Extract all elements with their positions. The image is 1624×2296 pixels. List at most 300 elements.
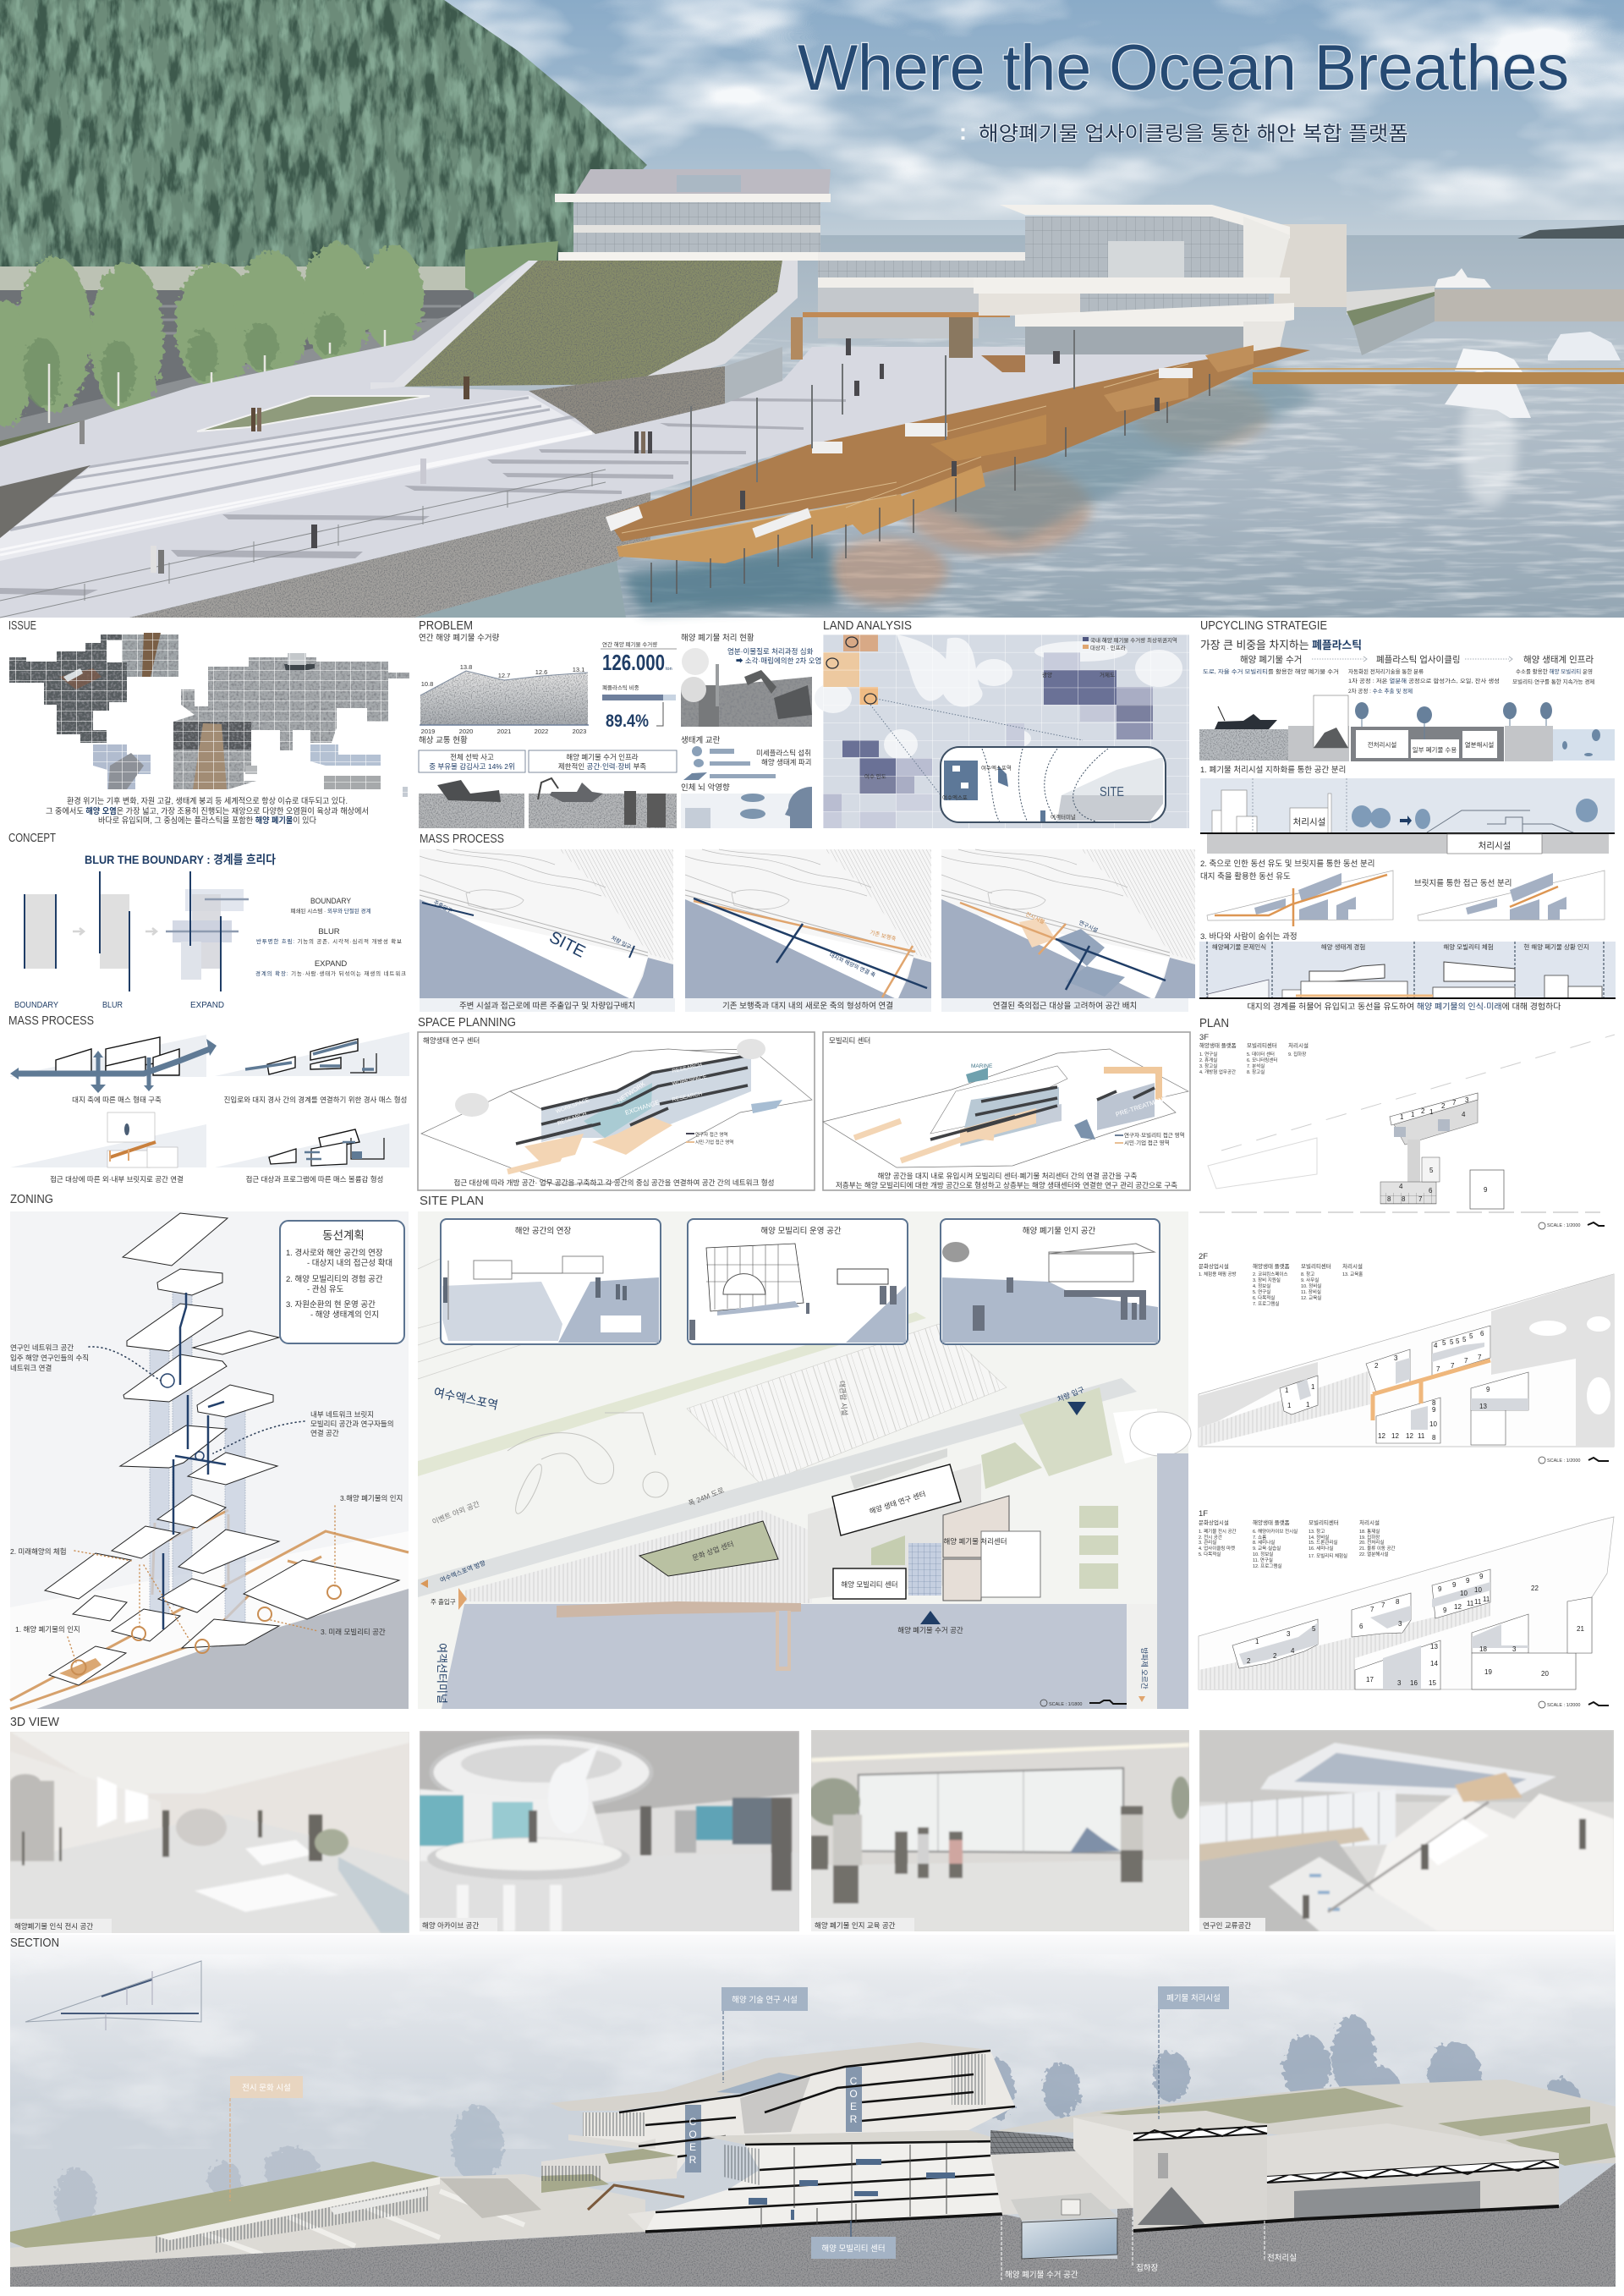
- floor plan 1F: 5: [1312, 1625, 1316, 1633]
- floor plan 1F: 2: [1273, 1652, 1277, 1660]
- scale bar 2F: SCALE : 1/2000: [1547, 1458, 1580, 1464]
- floor plan 1F: 14: [1430, 1660, 1438, 1667]
- label: waste treatment: [1158, 1986, 1229, 2121]
- heading: land analysis: LAND ANALYSIS: [823, 618, 912, 633]
- human brain impact illustration: [681, 783, 812, 828]
- ecosystem bars: 미세플라스틱 섭취: [756, 749, 811, 757]
- zoning annotations: 모빌리티 공간과 연구자들의: [310, 1420, 394, 1428]
- floor plan 2F: 문화상업시설: [1199, 1262, 1229, 1270]
- floor plan 1F: 15: [1429, 1679, 1436, 1687]
- step descriptions: 수소를 활용한 해양 모빌리티 운영: [1516, 667, 1593, 675]
- floor plan 1F: 17. 모빌리티 체험실: [1309, 1552, 1347, 1559]
- issue text: 그 중에서도 해양 오염은 가장 넓고, 가장 조용히 진행되는 재앙으로 다양한 오염원이 육상과 해상에서: [46, 806, 369, 816]
- floor plan 3F: 4: [1462, 1111, 1466, 1118]
- floor plan 1F: 9: [1466, 1577, 1470, 1585]
- floor plan 1F: 3: [1287, 1630, 1291, 1638]
- floor plan 1F: 3: [1512, 1645, 1517, 1653]
- concept title: BLUR THE BOUNDARY : 경계를 흐리다: [85, 853, 276, 866]
- zoning annotations: 연구인 네트워크 공간: [10, 1343, 74, 1352]
- floor plan 3F: 1: [1429, 1108, 1434, 1116]
- floor plan 3F: 2: [1421, 1107, 1425, 1115]
- research centre axonometric panel: 해양생태 연구 센터: [423, 1036, 480, 1045]
- scale bar 3F: SCALE : 1/2000: [1547, 1223, 1580, 1228]
- render: waste education space: [806, 1730, 1190, 1931]
- heading: 3d view: 3D VIEW: [10, 1715, 60, 1729]
- step 3 diagram: 현 해양 폐기물 상황 인지: [1523, 942, 1589, 951]
- grass verge: [0, 341, 431, 448]
- research building: [550, 2042, 1015, 2172]
- area chart: annual marine waste: 13.8: [460, 663, 472, 671]
- area chart: annual marine waste: 2020: [459, 728, 473, 735]
- maritime traffic boxes: 전체 선박 사고: [450, 753, 494, 761]
- render: awareness exhibition space: 해양폐기물 인식 전시 공간: [14, 1922, 93, 1931]
- wedge 1: [10, 1035, 217, 1093]
- floor plan 3F: 7: [1452, 1099, 1457, 1107]
- maritime photos: [419, 778, 677, 828]
- floor plan 3F: 7. 분석실: [1247, 1063, 1265, 1069]
- floor plan 1F: [1199, 1509, 1614, 1689]
- floor plan 3F: 7: [1418, 1195, 1423, 1203]
- floor plan 2F: 7. 프로그램실: [1253, 1300, 1279, 1307]
- floor plan 1F: 9: [1443, 1607, 1447, 1614]
- floor plan 1F: 8. 세미나실: [1253, 1539, 1275, 1546]
- bridge and core: [791, 224, 1347, 360]
- step 3 heading: 3. 바다와 사람이 숨쉬는 과정: [1200, 931, 1298, 942]
- research building: R: [689, 2154, 697, 2166]
- research centre axonometric panel: 시민·기업 접근 영역: [695, 1139, 733, 1145]
- step 3 diagram: 해양 모빌리티 체험: [1443, 942, 1494, 951]
- recycling section diagram: 일부 폐기물 수용: [1413, 745, 1457, 754]
- zoning annotations: 네트워크 연결: [10, 1364, 52, 1372]
- floor plan 2F: 2: [1374, 1362, 1379, 1370]
- floor plan 3F: 8: [1402, 1195, 1406, 1203]
- site plan map: [418, 1211, 1191, 1709]
- floor plan 2F: 4. 정보실: [1253, 1283, 1270, 1289]
- floor plan 1F: 10: [1474, 1586, 1482, 1594]
- floor plan 1F: 10: [1460, 1590, 1468, 1597]
- floor plan 2F: 1: [1311, 1383, 1315, 1391]
- world map photo mosaic: [8, 633, 411, 797]
- floor plan 1F: 1. 폐기물 전시 공간: [1199, 1528, 1237, 1535]
- floor plan 2F: 13. 교육홀: [1342, 1271, 1363, 1277]
- floor plan 3F: 4: [1399, 1183, 1403, 1190]
- research building: R: [850, 2113, 858, 2125]
- map 2: axes: 기존 보행축과 대지 내의 새로운 축의 형성하여 연결: [722, 1001, 893, 1011]
- floor plan 3F: 1: [1400, 1113, 1404, 1121]
- heading: mass process left: MASS PROCESS: [8, 1013, 94, 1028]
- zoning annotations: 3.해양 폐기물의 인지: [340, 1494, 403, 1502]
- site plan labels: 폭 24M 도로: [687, 1486, 726, 1508]
- panel: mass process wedges: [8, 1013, 409, 1184]
- label: marine technology research: [721, 1987, 808, 2083]
- map 1: entrances: 주출입구: [432, 898, 453, 915]
- step 2 heading: 2. 축으로 인한 동선 유도 및 브릿지를 통한 동선 분리: [1200, 859, 1374, 869]
- three-step headings: [1240, 654, 1594, 665]
- inset view: coastal extension: 해안 공간의 연장: [515, 1226, 571, 1236]
- floor plan 2F: 6: [1480, 1330, 1484, 1338]
- floor plan 1F: 8: [1396, 1598, 1400, 1606]
- site plan labels: 이벤트 야외 공간: [431, 1499, 480, 1526]
- scale bar 1F: [1539, 1701, 1609, 1708]
- floor plan 1F: 6: [1359, 1623, 1363, 1630]
- maritime traffic boxes: 중 부유물 감김사고 14% 2위: [429, 762, 515, 771]
- research centre axonometric panel: RESEARCH: [557, 1111, 588, 1127]
- background trees: [56, 2015, 1581, 2232]
- heading: section: SECTION: [10, 1936, 59, 1950]
- callout: circulation plan: - 관심 유도: [307, 1285, 344, 1294]
- floor plan 3F: 8: [1387, 1195, 1391, 1203]
- concept definitions: BOUNDARY: [310, 897, 352, 906]
- human brain impact illustration: 인체 뇌 악영향: [681, 783, 730, 793]
- floor plan 1F: 21: [1577, 1625, 1584, 1633]
- heading: space planning: SPACE PLANNING: [418, 1015, 516, 1030]
- map 3: program placement: 전시시설: [1024, 910, 1046, 926]
- floor plan 2F: 2. 코워킹스페이스: [1253, 1271, 1288, 1277]
- site plan labels: 해양 생태 연구 센터: [868, 1490, 927, 1516]
- waste plant block: [990, 2111, 1559, 2231]
- section perspective: [10, 1935, 1616, 2287]
- left building and green roof: [370, 169, 834, 434]
- render: marine archive space: 해양 아카이브 공간: [422, 1921, 479, 1930]
- zoning annotations: 연결 공간: [310, 1429, 339, 1437]
- inset view: mobility operation: 해양 모빌리티 운영 공간: [760, 1226, 842, 1236]
- floor plan 2F: 7: [1451, 1362, 1455, 1370]
- floor plan 2F: 5: [1456, 1338, 1460, 1345]
- waste treatment status with photo: [681, 633, 821, 727]
- wedge 4: [215, 1123, 409, 1167]
- floor plan 1F: 14. 정비실: [1309, 1534, 1329, 1541]
- site inset map: [941, 747, 1166, 822]
- floor plan 1F: 11: [1467, 1600, 1474, 1607]
- subtitle: 해양폐기물 업사이클링을 통한 해안 복합 플랫폼: [979, 123, 1408, 146]
- research building: O: [849, 2088, 858, 2100]
- label: marine mobility centre: [811, 2221, 896, 2259]
- diagram labels: BLUR: [102, 1000, 123, 1010]
- zoning annotations: 3. 미래 모빌리티 공간: [321, 1628, 386, 1636]
- floor plan 2F: 1. 체험용 매핑 공방: [1199, 1271, 1237, 1277]
- concept definitions: [255, 897, 406, 977]
- callout: circulation plan: 2. 해양 모빌리티의 경험 공간: [286, 1274, 383, 1284]
- floor plan 1F: 2. 전시 공간: [1199, 1534, 1222, 1541]
- floor plan 1F: 19. 집하장: [1359, 1534, 1380, 1541]
- heading: plan: PLAN: [1199, 1016, 1229, 1030]
- research centre axonometric panel: 연구자 접근 영역: [695, 1131, 727, 1138]
- land behind buildings: [990, 2079, 1616, 2164]
- diagram labels: BOUNDARY: [14, 1000, 58, 1010]
- stat: 126,000 ton: ton: [666, 667, 672, 672]
- step 2 diagram left: 대지 축을 활용한 동선 유도: [1200, 871, 1291, 882]
- floor plan 1F: 9: [1479, 1573, 1484, 1580]
- upcycling title: 가장 큰 비중을 차지하는 폐플라스틱: [1200, 639, 1362, 651]
- zoning annotations: 2. 미래해양의 체험: [10, 1547, 67, 1556]
- site inset map: 여객터미널: [1051, 813, 1076, 821]
- floor plan 2F: 13: [1479, 1403, 1487, 1410]
- step 2 diagram left: [1200, 871, 1393, 926]
- floor plan 3F: 6. 모니터링센터: [1247, 1057, 1277, 1063]
- people and lamps: [80, 330, 1160, 574]
- recycling section diagram: 열분해시설: [1465, 740, 1494, 749]
- floor plan 1F: 처리시설: [1359, 1519, 1380, 1526]
- labels: underground spaces: 전처리실: [1267, 2253, 1297, 2263]
- research building: E: [689, 2141, 696, 2153]
- step descriptions: 2차 공정 : 수소 추출 및 정제: [1348, 687, 1413, 695]
- recycling section diagram: [1199, 695, 1615, 761]
- floor plan 2F: 10: [1429, 1420, 1437, 1428]
- research centre axonometric panel: WORKSPACE: [672, 1074, 708, 1087]
- research centre axonometric panel: WORKSPACE: [555, 1097, 591, 1115]
- floor plan 1F: 9. 교육·실습실: [1253, 1545, 1281, 1552]
- floor plan 2F: 해양생태 플랫폼: [1253, 1262, 1290, 1270]
- floor plan 3F: 6: [1429, 1187, 1433, 1195]
- terraces and timber stair: [541, 2149, 744, 2232]
- callout: circulation plan: - 대상지 내의 접근성 확대: [307, 1258, 392, 1268]
- floor plan 1F: 6. 해양아카이브 전시실: [1253, 1528, 1298, 1535]
- stat: 89.4% plastic share: 89.4%: [606, 711, 649, 731]
- research building: C: [689, 2116, 697, 2128]
- floor plan 3F: 1. 연구실: [1199, 1051, 1217, 1057]
- maritime traffic boxes: 해양 폐기물 수거 인프라: [566, 753, 639, 761]
- floor plan 2F: 3. 장비 지원실: [1253, 1277, 1281, 1283]
- floor plan 2F: 6. 다목적실: [1253, 1294, 1275, 1301]
- step 2 diagram right: [1414, 871, 1605, 920]
- panel: plan: [1199, 1016, 1615, 1708]
- floor plan 1F: 9: [1452, 1581, 1457, 1589]
- breakwater and boats: [1253, 225, 1624, 418]
- title: Where the Ocean Breathes: [798, 32, 1569, 104]
- label: marine technology research: 해양 기술 연구 시설: [732, 1995, 798, 2005]
- labels: underground spaces: [1001, 2216, 1297, 2280]
- research centre axonometric panel: RESEARCH: [672, 1063, 703, 1074]
- site inset map: SITE: [1100, 785, 1124, 799]
- step descriptions: [1203, 667, 1594, 695]
- concept definitions: 반투명한 흐림: 기능의 공존, 시각적·심리적 개방성 확보: [256, 937, 402, 945]
- heading: issue: ISSUE: [8, 618, 36, 633]
- floor plan 1F: 3: [1398, 1620, 1402, 1628]
- area chart: annual marine waste: 13.1: [573, 666, 584, 673]
- ecosystem bars: 생태계 교란: [681, 735, 721, 745]
- floor plan 2F: 9: [1486, 1386, 1490, 1393]
- area chart: annual marine waste: 연간 해양 폐기물 수거량: [419, 633, 500, 643]
- floor plan 3F: 2. 휴게실: [1199, 1057, 1217, 1063]
- label: marine mobility centre: 해양 모빌리티 센터: [821, 2244, 886, 2254]
- site plan labels: 처량 입구: [1056, 1385, 1086, 1403]
- scale bar 3F: [1539, 1222, 1605, 1229]
- panel: land analysis: [815, 618, 1189, 828]
- expand diagram: [166, 871, 249, 991]
- floor plan 3F: 4. 개방형 업무공간: [1199, 1068, 1236, 1075]
- callout: circulation plan: [280, 1221, 404, 1343]
- floor plan 1F: 4: [1291, 1647, 1295, 1655]
- maritime traffic boxes: [419, 735, 677, 772]
- floor plan 1F: 12: [1454, 1603, 1462, 1611]
- legend: 대상지 · 인프라: [1090, 644, 1126, 651]
- floor plan 1F: 11: [1483, 1596, 1490, 1603]
- issue text: [46, 796, 369, 826]
- floor plan 1F: 22. 열분해시설: [1359, 1551, 1388, 1557]
- panel: site plan: [418, 1194, 1191, 1709]
- floor plan 1F: 22: [1531, 1585, 1539, 1592]
- floor plan 3F: 1: [1411, 1111, 1415, 1118]
- floor plan 2F: 12: [1391, 1432, 1399, 1440]
- panel: mass process maps: [420, 832, 1195, 1012]
- zoning annotations: [10, 1343, 403, 1636]
- site plan labels: 방파제 오르간: [1140, 1647, 1149, 1689]
- floor plan 1F: 9: [1438, 1585, 1442, 1593]
- floor plan 1F: 11. 연구실: [1253, 1557, 1273, 1563]
- maritime traffic boxes: 해상 교통 현황: [419, 735, 468, 745]
- maritime traffic boxes: 제한적인 공간·인력·장비 부족: [558, 762, 646, 771]
- site plan labels: 여객선터미널: [436, 1643, 448, 1704]
- floor plan 2F: 1: [1306, 1401, 1310, 1409]
- floor plan 1F: 해양생태 플랫폼: [1253, 1519, 1290, 1526]
- floor plan 3F: [1199, 1033, 1615, 1212]
- stat: 126,000 ton: 연간 해양 폐기물 수거량: [602, 640, 657, 648]
- scale bar 1F: SCALE : 1/2000: [1547, 1703, 1580, 1708]
- step 3 diagram: 해양폐기물 문제인식: [1212, 942, 1266, 951]
- mobility centre axonometric panel: [823, 1032, 1190, 1190]
- zoning annotations: 입주 해양 연구인들의 수직: [10, 1354, 89, 1362]
- right building: [974, 205, 1294, 372]
- map 1: entrances: 주변 시설과 접근로에 따른 주출입구 및 차량입구배치: [459, 1001, 635, 1011]
- floor plan 2F: 1: [1285, 1387, 1289, 1394]
- step 3 diagram: [1199, 942, 1616, 998]
- inset view: waste awareness: 해양 폐기물 인지 공간: [1023, 1226, 1096, 1236]
- floor plan 3F: 9: [1484, 1186, 1488, 1194]
- label: exhibition and culture: 전시 문화 시설: [242, 2084, 291, 2093]
- floor plan 3F: 모빌리티센터: [1247, 1041, 1277, 1049]
- floor plan 2F: 12: [1378, 1432, 1385, 1440]
- map 1: entrances: [420, 849, 675, 1012]
- recycling section diagram: 전처리시설: [1368, 740, 1396, 749]
- panel: issue: [8, 618, 411, 826]
- site plan labels: 해양 폐기물 처리센터: [943, 1537, 1007, 1546]
- floor plan 2F: 7: [1478, 1354, 1482, 1361]
- area chart: annual marine waste: 2019: [421, 728, 435, 735]
- floor plan 1F: 7: [1370, 1606, 1374, 1613]
- floor plan 2F: 1: [1287, 1402, 1292, 1409]
- floor plan 1F: 7: [1381, 1601, 1385, 1609]
- floor plan 2F: 5: [1442, 1339, 1446, 1347]
- floor plan 2F: 11. 장비실: [1301, 1288, 1321, 1295]
- blur diagram: [100, 871, 156, 991]
- wedge 2 caption: 진입로와 대지 경사 간의 경계를 연결하기 위한 경사 매스 형성: [224, 1096, 407, 1104]
- heading: site plan: SITE PLAN: [420, 1194, 484, 1208]
- wedge 3 caption: 접근 대상에 따른 외·내부 브릿지로 공간 연결: [50, 1175, 184, 1184]
- concept definitions: BLUR: [318, 927, 340, 937]
- site plan labels: 해양 폐기물 수거 공간: [897, 1626, 963, 1634]
- regional grid map: 거제도: [1100, 671, 1115, 678]
- area chart: annual marine waste: [419, 633, 589, 735]
- area chart: annual marine waste: 2022: [535, 728, 548, 735]
- heading: concept: CONCEPT: [8, 831, 56, 845]
- map 2: axes: [685, 849, 941, 1012]
- step 3 diagram: 해양 생태계 경험: [1321, 942, 1365, 951]
- step descriptions: 1차 공정 : 저온 열분해 공정으로 합성가스, 오일, 잔사 생성: [1348, 677, 1500, 684]
- map 2: axes: 대지와 해양의 연결 축: [828, 951, 877, 979]
- area chart: annual marine waste: 2021: [497, 728, 511, 735]
- floor plan 2F: [1199, 1252, 1614, 1447]
- stat: 89.4% plastic share: 폐플라스틱 비중: [602, 684, 639, 691]
- stat: 126,000 ton: 126.000: [602, 650, 665, 675]
- site plan labels: 여수엑스포역 방향: [438, 1558, 486, 1585]
- waste treatment status with photo: 해양 폐기물 처리 현황: [681, 633, 754, 643]
- floor plan 3F: 5: [1429, 1167, 1434, 1174]
- floor plan 2F: 9: [1432, 1406, 1436, 1414]
- floor plan 2F: 5: [1469, 1332, 1473, 1340]
- step 3 caption: 대지의 경계를 허물어 유입되고 동선을 유도하여 해양 폐기물의 인식·미래 에 대해 경험하다: [1247, 1002, 1561, 1012]
- step 1 diagram: [1200, 778, 1615, 854]
- floor plan 2F: 3: [1394, 1354, 1398, 1362]
- heading: upcycling strategie: UPCYCLING STRATEGIE: [1200, 618, 1327, 633]
- map 3: program placement: 연결된 축의접근 대상을 고려하여 공간 배치: [993, 1001, 1137, 1011]
- area chart: annual marine waste: 12.6: [535, 668, 547, 676]
- floor plan 2F: 모빌리티센터: [1301, 1262, 1331, 1270]
- area chart: annual marine waste: 2023: [573, 728, 586, 735]
- ecosystem bars: 해양 생태계 파괴: [761, 758, 811, 766]
- waste treatment status with photo: 염분·이물질로 처리과정 심화: [727, 647, 814, 656]
- floor plan 2F: 4: [1434, 1342, 1438, 1349]
- floor plan 3F: 9. 집하장: [1288, 1051, 1306, 1057]
- ecosystem bars: [681, 735, 811, 780]
- green-roof exhibition wedge: [10, 2161, 440, 2253]
- waste treatment status with photo: ➡ 소각·매립에의한 2차 오염: [736, 656, 821, 665]
- heading: mass process: MASS PROCESS: [420, 832, 504, 846]
- floor plan 1F: 문화상업시설: [1199, 1519, 1229, 1526]
- callout: circulation plan: 동선계획: [322, 1229, 365, 1242]
- floor plan 1F: 모빌리티센터: [1309, 1519, 1339, 1526]
- concept definitions: 경계의 확장: 기능·사람·생태가 뒤섞이는 재생의 네트워크: [255, 969, 406, 977]
- mountain forest: [0, 0, 647, 355]
- site inset map: 여수엑스포역: [981, 764, 1012, 772]
- boundary diagram: [25, 894, 84, 969]
- floor plan 2F: 12: [1406, 1432, 1413, 1440]
- floor plan 1F: 1: [1255, 1638, 1259, 1645]
- floor plan 2F: 7: [1436, 1365, 1440, 1373]
- regional grid map: 여수 인도: [864, 772, 886, 780]
- panel: upcycling strategy: [1199, 618, 1616, 1012]
- floor plan 1F: 12. 프로그램실: [1253, 1563, 1281, 1569]
- mobility centre axonometric panel: PRE-TREATMENT: [1115, 1095, 1168, 1118]
- render: marine archive space: [420, 1731, 799, 1931]
- floor plan 3F: 5. 데이터 센터: [1247, 1051, 1275, 1057]
- panel: section: [10, 1935, 1616, 2287]
- floor plan 2F: 8: [1432, 1434, 1436, 1442]
- row of birch trees: [0, 242, 424, 427]
- map 1: entrances: 처량 입구: [610, 934, 633, 951]
- floor plan 1F: 3. 관리실: [1199, 1539, 1216, 1546]
- site plan labels: SCALE : 1/1800: [1049, 1702, 1082, 1707]
- step descriptions: 모빌리티·연구를 통한 지속가능 경제: [1512, 678, 1594, 685]
- floor plan 1F: 5. 다목적실: [1199, 1551, 1221, 1557]
- site plan labels: 문화 상업 센터: [691, 1540, 735, 1563]
- three-step headings: 해양 생태계 인프라: [1523, 654, 1594, 665]
- floor plan 2F: 11: [1418, 1432, 1425, 1440]
- panel: concept: [8, 831, 406, 1010]
- key plan: [25, 1961, 201, 2030]
- zoning annotations: 내부 네트워크 브릿지: [310, 1410, 374, 1419]
- legend: 국내 해양 폐기물 수거량 최상위권지역: [1090, 636, 1177, 644]
- research centre axonometric panel: EXCHANGE: [624, 1098, 661, 1117]
- floor plan 1F: 20. 전처리실: [1359, 1539, 1384, 1546]
- map 3: program placement: 연구시설: [1078, 920, 1099, 934]
- three-step headings: 폐플라스틱 업사이클링: [1376, 654, 1461, 665]
- floor plan 1F: 21. 물류 이동 공간: [1359, 1545, 1396, 1552]
- render: awareness exhibition space: [10, 1732, 409, 1933]
- panel: zoning: [10, 1192, 409, 1709]
- panel: problem: [419, 618, 821, 828]
- mobility centre axonometric panel: MARINE: [971, 1063, 993, 1069]
- scale bar 2F: [1539, 1457, 1609, 1464]
